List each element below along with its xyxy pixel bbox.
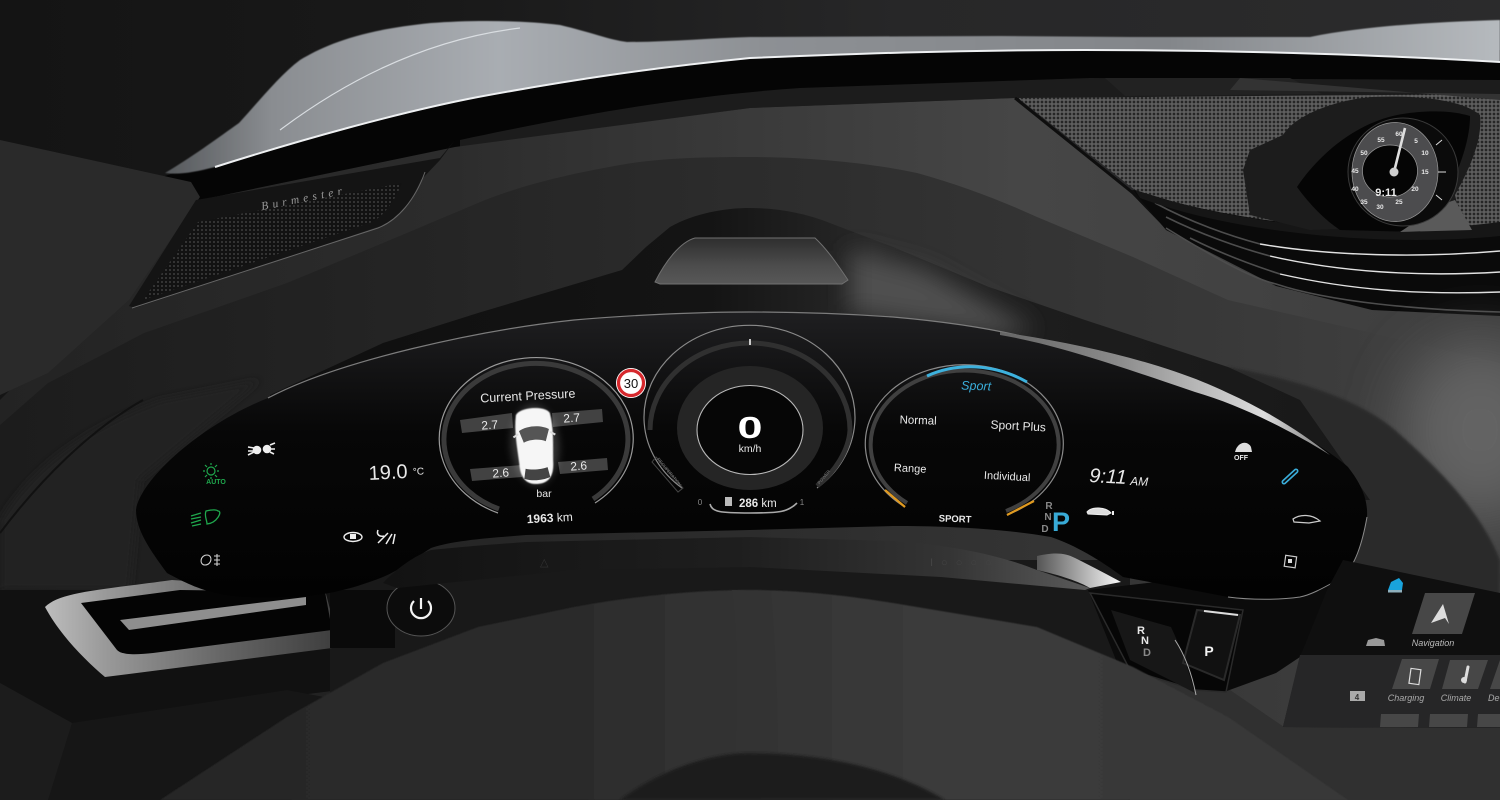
icon: home tile (1388, 578, 1403, 590)
right gauge: drive modes: Range (894, 462, 927, 476)
car tile (1366, 638, 1385, 646)
left air vent (45, 580, 340, 677)
icon: fog light (201, 554, 220, 566)
steering wheel rim (160, 590, 1348, 800)
windshield area (0, 0, 1500, 190)
gear selector: N (1141, 635, 1149, 647)
clock dial: 45 (1351, 168, 1359, 175)
clock dial: 55 (1377, 137, 1385, 144)
center gauge: speedometer: km/h (739, 443, 762, 455)
gear indicator: N (1044, 512, 1052, 523)
pressure values: 2.6 (492, 465, 510, 481)
temperature: 19.0 (368, 461, 408, 485)
black band below windshield (165, 50, 1500, 205)
warning glyphs: △ (540, 557, 549, 569)
pressure bars (460, 409, 608, 481)
gear selector: R (1137, 625, 1145, 637)
icon: white car top view (508, 403, 562, 487)
touch panel: Charging (1388, 693, 1424, 703)
icon: auto lights (203, 463, 226, 486)
suede right corner (1400, 340, 1500, 520)
pressure values: 2.7 (481, 417, 499, 433)
clock dial: 60 (1395, 131, 1403, 138)
center gauge: speedometer (644, 325, 855, 492)
park button (1183, 610, 1240, 680)
speaker grille: left: Burmester (260, 185, 344, 213)
right gauge: drive modes (865, 365, 1063, 526)
steering wheel hub (620, 753, 945, 800)
icon: auto lights: AUTO (206, 479, 226, 486)
time (1089, 465, 1149, 489)
right gauge: drive modes: Sport (961, 378, 992, 394)
touch panel: De (1488, 693, 1500, 703)
clock dial: 50 (1360, 150, 1368, 157)
speed limit sign (616, 368, 646, 398)
speaker grille: right (1015, 78, 1500, 240)
right inner hood (1228, 367, 1500, 620)
center hump (655, 238, 848, 284)
clock dial: 5 (1414, 138, 1418, 145)
pressure values: 2.7 (563, 410, 581, 426)
icon: spoiler blue (1284, 471, 1296, 482)
touch panel (1283, 560, 1500, 728)
touch panel: Climate (1441, 693, 1471, 703)
clock dial: 25 (1395, 199, 1403, 206)
right gauge: drive modes: Individual (984, 470, 1031, 484)
touch panel: Navigation (1412, 638, 1454, 648)
gear selector (1090, 593, 1243, 695)
gear selector: P (1204, 643, 1214, 659)
clock dial: 9:11 (1375, 187, 1397, 199)
range display: 0 (698, 498, 703, 507)
badge (1350, 691, 1365, 701)
icon: square lamp (1284, 555, 1297, 568)
left gauge: tyre pressure: bar (536, 488, 552, 500)
left gauge: tyre pressure (439, 358, 633, 526)
icon: traction off (1234, 443, 1252, 462)
hood inner shell (270, 208, 1370, 500)
clock dial: 30 (1376, 204, 1384, 211)
gear selector: D (1143, 647, 1151, 659)
range display: 1 (800, 498, 805, 507)
next tile (1490, 660, 1500, 689)
icon: car side (1293, 515, 1320, 523)
gear indicator (1041, 501, 1070, 537)
power switch block (330, 590, 395, 648)
icon: car small (1087, 508, 1114, 515)
charging tile (1392, 659, 1439, 689)
left gauge: tyre pressure: 1963 km (526, 510, 573, 526)
icon: low beam (191, 510, 220, 526)
clock dial: 20 (1411, 186, 1419, 193)
speed limit sign: 30 (624, 376, 638, 391)
lower dash center (330, 560, 1130, 800)
air vent slats (1133, 190, 1500, 316)
speaker grille: left (129, 140, 455, 308)
cluster ledge (383, 537, 1121, 590)
center gauge: speedometer: 0 (738, 410, 762, 445)
bottom tiles (1380, 714, 1500, 727)
time: 9:11 (1089, 465, 1127, 489)
clock dial: 15 (1421, 169, 1429, 176)
climate tile (1442, 660, 1488, 689)
clock dial: 10 (1421, 150, 1429, 157)
clock dial (1348, 118, 1458, 226)
clock housing and dial (1135, 97, 1500, 240)
cluster upper silver edge (268, 312, 1195, 398)
gear indicator: R (1045, 501, 1053, 512)
gear indicator: D (1041, 524, 1049, 535)
icon: traction off: OFF (1234, 455, 1249, 462)
pressure values: 2.6 (570, 458, 588, 474)
pressure values (481, 410, 588, 481)
center gauge: speedometer: POWER (816, 468, 832, 485)
clock dial: 35 (1360, 199, 1368, 206)
touch panel: 4 (1355, 693, 1360, 702)
range display (698, 497, 805, 513)
warning glyphs (540, 557, 1000, 569)
right gauge: drive modes: Normal (899, 414, 937, 428)
center gauge: speedometer: RECUPERATION (656, 457, 682, 487)
time: AM (1129, 474, 1149, 489)
left leather panel (0, 380, 260, 590)
navigation tile (1412, 593, 1475, 634)
right gauge: drive modes: SPORT (939, 513, 972, 526)
icon: driver status left (344, 530, 395, 544)
lower dash right leather (1130, 660, 1500, 800)
black panel under cluster right (1088, 560, 1343, 692)
upper dash surface (0, 98, 1500, 600)
gauge title: Current Pressure (480, 387, 576, 405)
lower dash left (0, 590, 340, 800)
power button (387, 580, 455, 636)
warning glyphs: I○○○○ (930, 557, 1000, 569)
suede left pad (0, 140, 200, 395)
range display: 286 km (739, 498, 777, 510)
icon: parking lights (248, 443, 275, 455)
clock dial: 40 (1351, 186, 1359, 193)
defrost vent strip (460, 78, 1500, 148)
cluster display glass (136, 312, 1367, 599)
gear indicator: P (1052, 507, 1070, 537)
wiper reflection (165, 20, 1500, 174)
hood metal highlight (850, 250, 1035, 335)
cluster lower rim (1228, 517, 1367, 599)
temperature: °C (413, 466, 424, 478)
right gauge: drive modes: Sport Plus (990, 418, 1046, 434)
